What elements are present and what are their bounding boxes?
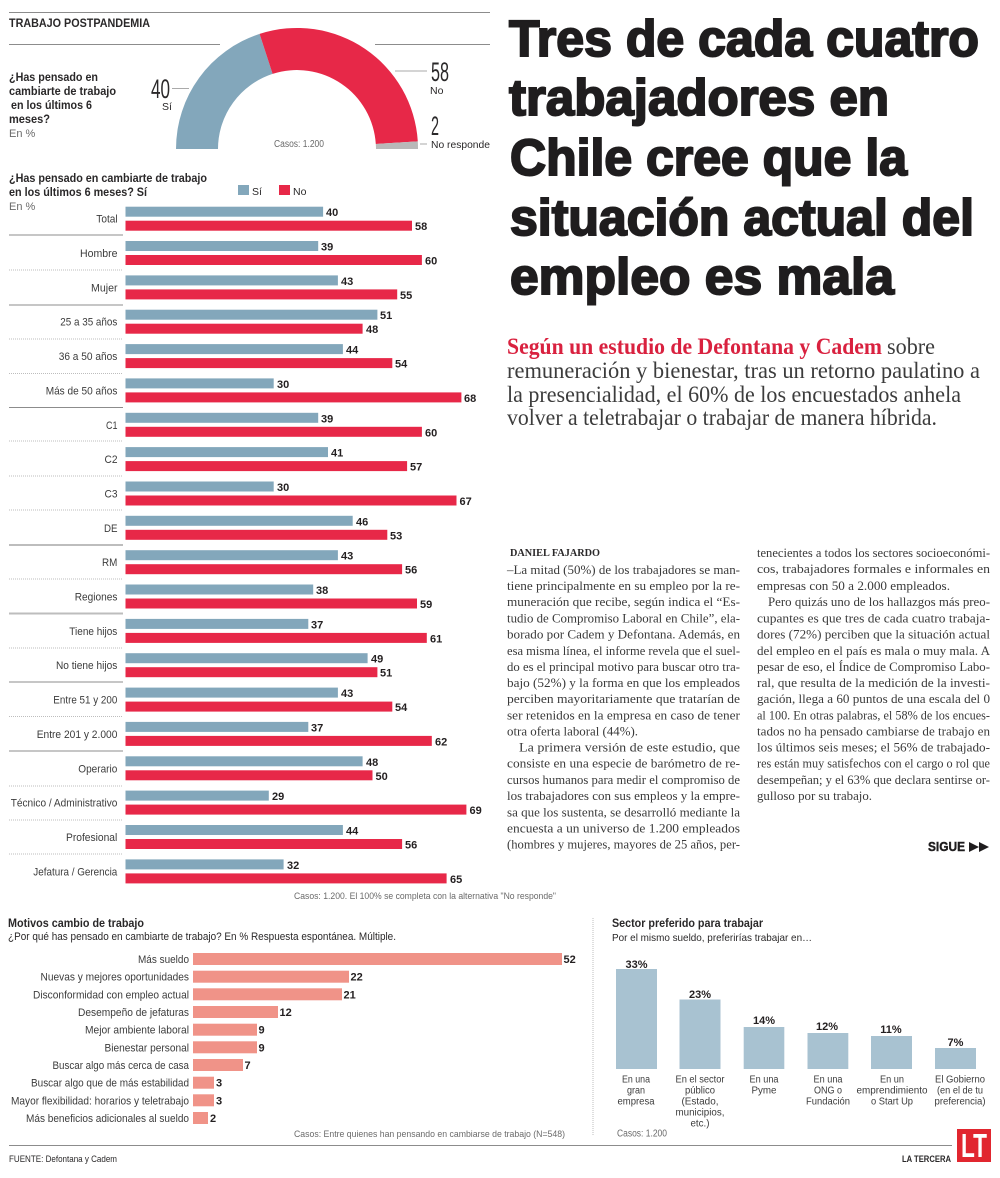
- row: Hombre: 60: [425, 256, 437, 268]
- row: Mayor flexibilidad: Mayor flexibilidad: horarios y teletrabajo: [11, 1095, 189, 1107]
- row: RM: [102, 550, 417, 577]
- panel: motivos cambio de trabajo: [8, 916, 576, 1140]
- column: El Gobierno: [934, 1037, 986, 1108]
- gauge question: [9, 72, 116, 140]
- column: En una ONG o Fundación: Fundación: [806, 1096, 850, 1108]
- row: Bienestar personal: [104, 1041, 265, 1054]
- row: No tiene hijos: 51: [380, 668, 392, 680]
- article column 1: encuesta a un universo de 1.200 empleados: [507, 820, 740, 836]
- row: Bienestar personal: 9: [258, 1042, 265, 1054]
- row: Técnico / Administrativo: 69: [470, 805, 482, 817]
- row: Operario: [78, 756, 388, 783]
- row: Mejor ambiente laboral: [85, 1024, 265, 1037]
- gauge question: ¿Has pensado en: [9, 72, 98, 84]
- column: En un emprendimiento o Start Up: En un: [880, 1074, 904, 1086]
- row: Total: 40: [326, 207, 338, 219]
- bar chart note: Casos: 1.200. El 100% se completa con la alternativa "No responde": [294, 891, 556, 902]
- row: C3: C3: [104, 488, 118, 500]
- column: En una gran empresa: [616, 959, 657, 1108]
- row: Entre 201 y 2.000: 62: [435, 736, 447, 748]
- article column 2: ral, que resulta de la medición de la investi-: [757, 675, 990, 690]
- row: Más sueldo: Más sueldo: [138, 954, 189, 966]
- article column 1: La primera versión de este estudio, que: [519, 740, 740, 754]
- row: Entre 51 y 200: 43: [341, 688, 353, 700]
- row: Hombre: [80, 241, 437, 268]
- row: Tiene hijos: 61: [430, 633, 442, 645]
- column: En una ONG o Fundación: 12%: [816, 1021, 838, 1033]
- row: RM: 43: [341, 551, 353, 563]
- row: Mayor flexibilidad: 3: [216, 1095, 222, 1107]
- section title: TRABAJO POSTPANDEMIA: [9, 18, 150, 30]
- article column 2: del empleo en el país es mala o muy mala. A: [757, 643, 991, 658]
- row: Entre 51 y 200: 54: [395, 702, 408, 714]
- row: Profesional: 56: [405, 840, 417, 852]
- column: En una Pyme: Pyme: [752, 1086, 777, 1096]
- row: Entre 51 y 200: Entre 51 y 200: [53, 695, 117, 707]
- row: Mujer: [91, 275, 412, 302]
- row: RM: RM: [102, 557, 117, 569]
- column: En una ONG o Fundación: [806, 1021, 850, 1108]
- row: C2: 41: [331, 448, 343, 460]
- gauge label: 2 No responde: [420, 111, 490, 151]
- article column 2: [757, 545, 991, 803]
- deck paragraph: remuneración y bienestar, tras un retorno paulatino a: [507, 358, 980, 383]
- row: Entre 201 y 2.000: Entre 201 y 2.000: [37, 729, 117, 741]
- row: No tiene hijos: 49: [371, 654, 383, 666]
- row: Profesional: [66, 825, 417, 852]
- row: No tiene hijos: [56, 653, 392, 680]
- gauge label: 2 No responde: 2: [431, 111, 439, 141]
- bar chart heading: en los últimos 6 meses? Sí: [9, 187, 148, 199]
- row: Disconformidad con empleo actual: Disconformidad con empleo actual: [33, 989, 189, 1001]
- row: Tiene hijos: Tiene hijos: [69, 626, 118, 638]
- row: DE: 53: [390, 530, 402, 542]
- row: Más de 50 años: [46, 378, 476, 405]
- gauge question: cambiarte de trabajo: [9, 86, 116, 98]
- row: Más sueldo: [138, 953, 576, 966]
- article byline: DANIEL FAJARDO: [510, 547, 600, 559]
- article column 1: cursos humanos para medir el compromiso de: [507, 772, 740, 787]
- column: En el sector público: 23%: [689, 989, 711, 1001]
- article column 2: tados no ha pensado cambiarse de trabajo en: [757, 724, 990, 738]
- row: Más sueldo: 52: [564, 954, 576, 966]
- icon: La Tercera logo: LT: [961, 1127, 987, 1164]
- column: En un emprendimiento o Start Up: emprendimiento: [856, 1086, 928, 1096]
- row: Operario: Operario: [78, 763, 117, 775]
- column: En el sector público: En el sector: [676, 1074, 725, 1086]
- row: DE: DE: [104, 523, 118, 535]
- sector heading: Por el mismo sueldo, preferirías trabajar en…: [612, 932, 812, 944]
- article column 1: muneración que recibe, según indica el “Es-: [507, 594, 740, 609]
- row: Profesional: Profesional: [66, 832, 117, 844]
- continue marker with arrows: SIGUE: [928, 840, 965, 854]
- row: Regiones: [75, 584, 432, 611]
- row: DE: 46: [356, 516, 368, 528]
- row: Mujer: Mujer: [91, 282, 118, 294]
- row: No tiene hijos: No tiene hijos: [56, 660, 118, 672]
- legend: [238, 185, 307, 198]
- row: Desempeño de jefaturas: [78, 1006, 292, 1019]
- column: En el sector público: municipios,: [676, 1108, 724, 1118]
- row: Hombre: 39: [321, 242, 333, 254]
- column: El Gobierno: 7%: [948, 1037, 964, 1049]
- row: Técnico / Administrativo: [11, 791, 482, 817]
- article column 2: tenecientes a todos los sectores socioeconómi-: [757, 545, 990, 560]
- row: Hombre: Hombre: [80, 248, 118, 260]
- row: Entre 51 y 200: [53, 688, 408, 714]
- gauge label: 58 No: No: [430, 85, 444, 97]
- column: En una Pyme: 14%: [753, 1015, 775, 1027]
- gauge question: En %: [9, 128, 36, 140]
- column: En una Pyme: En una: [750, 1074, 779, 1086]
- semicircle gauge: [176, 28, 418, 149]
- legend: No: [293, 186, 307, 198]
- row: Profesional: 44: [346, 826, 359, 838]
- row: C2: [104, 447, 422, 474]
- row: RM: 56: [405, 565, 417, 577]
- row: Disconformidad con empleo actual: 21: [344, 989, 356, 1001]
- column: En un emprendimiento o Start Up: o Start Up: [871, 1096, 913, 1108]
- row: Entre 201 y 2.000: 37: [311, 722, 323, 734]
- row: Operario: 48: [366, 757, 378, 769]
- column: En el sector público: etc.): [690, 1118, 710, 1130]
- gauge label: 58 No: [395, 57, 449, 97]
- motivos heading: Motivos cambio de trabajo: [8, 916, 144, 930]
- legend: Sí: [252, 186, 262, 198]
- column: En el sector público: (Estado,: [682, 1096, 718, 1108]
- bar chart heading: En %: [9, 201, 36, 213]
- column: En una ONG o Fundación: En una: [814, 1074, 843, 1086]
- column: En una gran empresa: 33%: [625, 959, 648, 971]
- deck paragraph: Según un estudio de Defontana y Cadem: [507, 334, 882, 359]
- row: Jefatura / Gerencia: 32: [287, 860, 299, 872]
- gauge label: 58 No: 58: [431, 57, 449, 87]
- row: Tiene hijos: 37: [311, 619, 323, 631]
- row: Total: 58: [415, 221, 427, 233]
- row: Más beneficios adicionales al sueldo: Más beneficios adicionales al sueldo: [26, 1113, 189, 1125]
- article column 2: empresas con 50 a 2.000 empleados.: [757, 578, 950, 593]
- motivos heading: ¿Por qué has pensado en cambiarte de trabajo? En % Respuesta espontánea. Múltiple.: [8, 931, 396, 943]
- article column 1: borado por Cadem y Defontana. Además, en: [507, 626, 740, 642]
- row: Total: Total: [96, 214, 118, 226]
- continue marker with arrows: [928, 840, 989, 854]
- sector note: Casos: 1.200: [617, 1128, 667, 1140]
- column: En un emprendimiento o Start Up: [856, 1024, 928, 1108]
- column: En una gran empresa: En una: [622, 1074, 650, 1086]
- sector heading: Sector preferido para trabajar: [612, 916, 763, 930]
- row: C1: 39: [321, 413, 333, 425]
- row: Mujer: 43: [341, 276, 353, 288]
- article column 2: cos, trabajadores formales e informales en: [757, 561, 991, 576]
- article column 1: bajo (52%) y la forma en que los empleados: [507, 675, 740, 690]
- article column 1: tudio de Compromiso Laboral en Chile”, ela-: [507, 610, 740, 626]
- row: Más de 50 años: Más de 50 años: [46, 385, 118, 397]
- row: Más beneficios adicionales al sueldo: 2: [210, 1113, 216, 1125]
- row: 25 a 35 años: 51: [380, 310, 392, 322]
- article column 1: consiste en una especie de barómetro de re-: [507, 756, 740, 770]
- gauge label: 40 Sí: Sí: [162, 101, 172, 113]
- row: C2: C2: [104, 454, 118, 466]
- row: Disconformidad con empleo actual: [33, 988, 356, 1001]
- article column 2: los últimos seis meses; el 56% de trabajado-: [757, 740, 990, 754]
- headline: trabajadores en: [509, 69, 889, 126]
- row: Buscar algo más cerca de casa: 7: [244, 1060, 251, 1072]
- column: En el sector público: [676, 989, 725, 1130]
- article column 1: ser retenidos en la empresa en caso de tener: [507, 708, 741, 722]
- article column 2: Pero quizás uno de los hallazgos más preo-: [768, 594, 990, 609]
- row: 36 a 50 años: 54: [395, 359, 408, 371]
- deck paragraph: volver a teletrabajar o trabajar de manera híbrida.: [507, 405, 937, 430]
- row: Regiones: 38: [316, 585, 328, 597]
- row: Mejor ambiente laboral: Mejor ambiente laboral: [85, 1025, 189, 1037]
- row: C3: [104, 482, 472, 508]
- article column 2: desempeñan; y el 63% que declara sentirse or-: [757, 772, 990, 787]
- row: 25 a 35 años: 25 a 35 años: [60, 317, 118, 329]
- row: Jefatura / Gerencia: 65: [450, 874, 462, 886]
- column: En una gran empresa: gran: [627, 1086, 645, 1096]
- column: En una ONG o Fundación: ONG o: [814, 1086, 842, 1096]
- headline: empleo es mala: [510, 248, 895, 305]
- headline: Chile cree que la: [510, 129, 908, 186]
- row: 25 a 35 años: [60, 310, 392, 336]
- headline: Tres de cada cuatro: [509, 10, 979, 67]
- row: Desempeño de jefaturas: 12: [280, 1007, 292, 1019]
- row: Buscar algo más cerca de casa: Buscar algo más cerca de casa: [52, 1060, 190, 1072]
- gauge label: 2 No responde: No responde: [431, 139, 490, 151]
- row: 36 a 50 años: 36 a 50 años: [59, 351, 118, 363]
- column: En una gran empresa: empresa: [618, 1096, 655, 1108]
- row: C1: [106, 413, 437, 439]
- article column 1: esa misma línea, el informe revela que el suel-: [507, 643, 740, 658]
- article column 1: –La mitad (50%) de los trabajadores se man-: [506, 562, 740, 577]
- gauge question: en los últimos 6: [11, 100, 92, 112]
- row: Técnico / Administrativo: 29: [272, 791, 284, 803]
- article column 2: pesar de eso, el Índice de Compromiso Labo-: [757, 659, 990, 674]
- article column 1: los trabajadores con sus empleos y la empre-: [507, 788, 740, 803]
- column: En una Pyme: [744, 1015, 784, 1096]
- column: En el sector público: público: [685, 1086, 715, 1096]
- article column 1: do es el principal motivo para buscar otro tra-: [507, 659, 740, 674]
- row: 25 a 35 años: 48: [366, 324, 378, 336]
- article column 2: gación, llega a 60 puntos de una escala del 0: [757, 691, 990, 706]
- row: Más de 50 años: 30: [277, 379, 289, 391]
- row: Mejor ambiente laboral: 9: [258, 1025, 265, 1037]
- motivos heading: [8, 916, 396, 943]
- bar chart heading: ¿Has pensado en cambiarte de trabajo: [9, 173, 207, 185]
- headline: situación actual del: [510, 189, 974, 246]
- panel: gauge chart section: [9, 12, 490, 151]
- motivos note: Casos: Entre quienes han pensando en cambiarse de trabajo (N=548): [294, 1129, 565, 1140]
- deck paragraph: la presencialidad, el 60% de los encuestados anhela: [507, 382, 961, 407]
- headline: [509, 10, 979, 305]
- column: En un emprendimiento o Start Up: 11%: [880, 1024, 902, 1036]
- row: C3: 67: [460, 496, 472, 508]
- deck paragraph: [507, 334, 980, 430]
- article column 2: al 100. En otras palabras, el 58% de los encues-: [757, 708, 990, 722]
- row: 36 a 50 años: [59, 344, 408, 371]
- row: Nuevas y mejores oportunidades: [40, 971, 363, 984]
- row: Mujer: 55: [400, 290, 412, 302]
- publisher name: LA TERCERA: [902, 1154, 951, 1165]
- row: Regiones: Regiones: [75, 592, 118, 604]
- row: Nuevas y mejores oportunidades: 22: [350, 972, 363, 984]
- row: C2: 57: [410, 462, 422, 474]
- row: Más de 50 años: 68: [464, 393, 476, 405]
- row: Tiene hijos: [69, 619, 442, 645]
- row: Operario: 50: [376, 771, 388, 783]
- article column 1: tiene principalmente en su empleo por la re-: [507, 578, 740, 593]
- row: C1: C1: [106, 420, 118, 432]
- panel: demographic bar chart: [9, 173, 556, 902]
- row: Técnico / Administrativo: Técnico / Administrativo: [11, 798, 117, 810]
- article column 2: res están muy satisfechos con el cargo o rol que: [757, 756, 990, 770]
- column: El Gobierno: preferencia): [934, 1096, 986, 1108]
- panel: sector preferido: [612, 916, 986, 1140]
- row: 36 a 50 años: 44: [346, 345, 359, 357]
- row: Desempeño de jefaturas: Desempeño de jefaturas: [78, 1007, 189, 1019]
- gauge label: 40 Sí: 40: [151, 74, 170, 104]
- column: El Gobierno: (en el de tu: [937, 1086, 983, 1096]
- row: Buscar algo que de más estabilidad: 3: [216, 1078, 222, 1090]
- row: Regiones: 59: [420, 599, 432, 611]
- source: FUENTE: Defontana y Cadem: [9, 1154, 117, 1165]
- gauge cases note: Casos: 1.200: [274, 139, 324, 150]
- row: Entre 201 y 2.000: [37, 722, 447, 748]
- article column 1: sa que los sustenta, se desarrolló mediante la: [507, 804, 740, 820]
- gauge label: 40 Sí: [151, 74, 189, 113]
- sector heading: [612, 916, 812, 944]
- row: Buscar algo que de más estabilidad: Buscar algo que de más estabilidad: [31, 1078, 189, 1090]
- row: Total: [96, 207, 427, 233]
- row: Jefatura / Gerencia: [33, 859, 462, 886]
- row: Bienestar personal: Bienestar personal: [104, 1042, 189, 1054]
- deck paragraph: sobre: [887, 334, 935, 359]
- article column 2: gulloso por su trabajo.: [757, 788, 872, 803]
- bar chart heading: [9, 173, 207, 213]
- gauge question: meses?: [9, 114, 50, 126]
- row: Nuevas y mejores oportunidades: Nuevas y mejores oportunidades: [40, 972, 189, 984]
- article column 1: otra oferta laboral (44%).: [507, 724, 638, 738]
- article column 1: (hombres y mujeres, mayores de 25 años, per-: [507, 836, 740, 852]
- row: C3: 30: [277, 482, 289, 494]
- article column 1: perciben mayoritariamente que tratarían de: [507, 691, 740, 706]
- column: El Gobierno: El Gobierno: [935, 1074, 985, 1086]
- article column 2: cupantes es que tres de cada cuatro trabaja-: [757, 610, 990, 626]
- article column 2: dores (72%) perciben que la situación actual: [757, 626, 990, 642]
- article column 1: [506, 562, 741, 852]
- row: DE: [104, 516, 402, 542]
- row: Jefatura / Gerencia: Jefatura / Gerencia: [33, 866, 118, 878]
- row: C1: 60: [425, 427, 437, 439]
